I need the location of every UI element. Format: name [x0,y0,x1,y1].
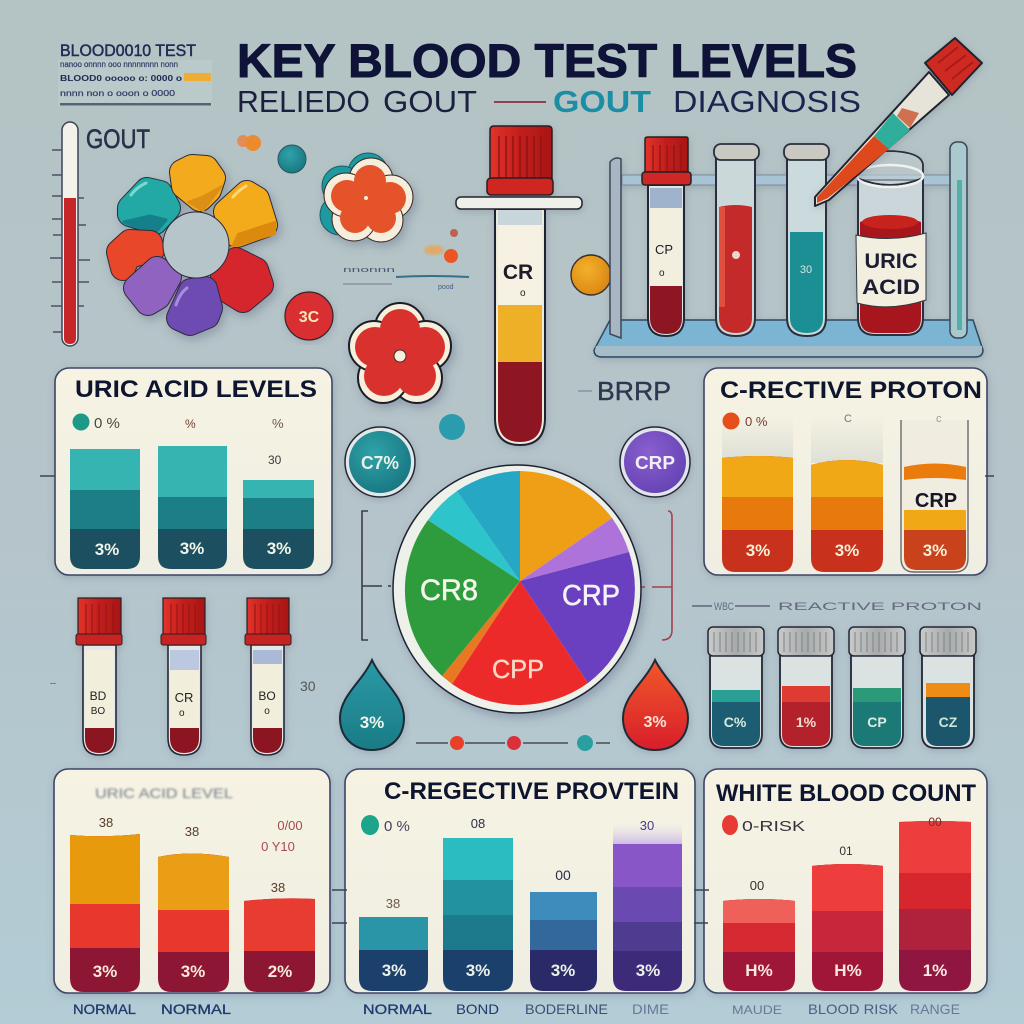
value labels: 0/00 [277,818,303,833]
legend: 0-RISK [742,818,805,835]
tube 2 [714,144,759,336]
vial 3 [849,627,905,748]
centre test tube: CRP: o [520,288,526,299]
bar chart: 1% [923,961,947,980]
label: BRRP: BRRP [597,376,671,406]
jar: uric acid: ACID [862,276,920,299]
legend: 38 [386,896,400,911]
legend [72,414,284,467]
vial 3: CP [867,714,887,730]
panel: uric acid bars bottom [54,769,330,993]
value labels: 38 [185,824,199,839]
legend: 08 [471,816,485,831]
test tube rack [594,137,983,357]
thermometer gauge [50,122,90,346]
bar chart: CRP [915,490,957,512]
legend: 0 % [745,414,768,429]
dotted connector [416,735,610,751]
badge: purple CRP [620,427,690,497]
info card: blood test: BLOOD0010 TEST [60,41,196,60]
icon: teal bead [278,145,306,173]
small chart caption [343,267,469,291]
x-axis labels: BOND [456,1001,499,1017]
legend: 00 [555,867,571,883]
small labels left of tubes: -- [50,678,56,688]
tube a: BD [90,689,107,703]
heading: URIC ACID LEVELS [75,376,317,403]
pie chart: CRP [562,580,620,612]
bar chart: H% [834,961,862,980]
legend: 00 [928,815,942,829]
vial 2: 1% [796,714,817,730]
tube 3 [784,144,829,336]
info card: blood test: nnnn non o ooon o 0000 [60,89,176,98]
orange sphere [571,255,611,295]
bar chart: 3% [466,961,490,980]
bar chart [723,821,971,991]
bar chart: 3% [746,541,770,560]
vials [708,627,976,748]
pie chart [393,465,641,713]
legend: % [185,417,196,431]
tube a: BO [91,706,105,717]
bar chart: 3% [551,961,575,980]
angled test tube [815,38,982,206]
subtitle: RELIEDO [237,84,370,119]
slice: purple [520,552,635,683]
subtitle: DIAGNOSIS [673,84,861,119]
small labels left of tubes [50,678,316,694]
title: KEY BLOOD TEST LEVELS [237,34,857,87]
info card: blood test: nanoo onnnn ooo nnnnnnnn nonn [60,60,178,69]
slice: red [452,581,588,705]
icon: pill ring [119,167,275,323]
value labels: 0 Y10 [261,839,295,854]
badge: purple CRP: CRP [635,453,675,473]
panel: c-reactive protein bottom [345,769,695,993]
x-axis labels: DIME [632,1001,669,1017]
right bracket [640,511,672,640]
bar chart: 3% [267,539,291,558]
rack base [594,320,983,357]
x-axis labels: BLOOD RISK [808,1001,899,1017]
x-axis labels: NORMAL [161,1001,231,1017]
badge: teal C7% [345,427,415,497]
x-axis labels: RANGE [910,1001,960,1017]
slice: cyan [428,491,520,581]
legend: 00 [750,878,764,893]
icon: flower two [349,303,451,403]
vial 1 [708,627,764,748]
centre test tube: CRP [456,126,582,445]
bar chart [722,415,968,572]
bar chart [70,834,315,992]
cap [487,126,553,195]
icon: red tablet [285,292,333,340]
legend [722,412,942,430]
caption: reactive protein: WBC [714,601,734,613]
bar chart [359,822,682,991]
subtitle: GOUT [383,84,477,119]
info card: blood test [58,41,212,106]
centre test tube: CRP: CR [503,261,533,284]
subtitle: GOUT [553,84,651,119]
tube c: o [264,706,270,717]
jar: uric acid [856,151,926,335]
legend [722,815,942,893]
x-axis labels [73,1001,960,1017]
rack posts [610,142,967,338]
bar chart: 3% [636,961,660,980]
vial 4: CZ [939,714,958,730]
tube c [245,598,291,755]
caption: reactive protein: REACTIVE PROTON [778,601,982,613]
bar chart: 3% [95,540,119,559]
drop: teal: 3% [360,713,384,732]
legend: % [272,416,284,431]
pie chart: CPP [492,654,544,684]
bar chart: 3% [835,541,859,560]
bar chart [70,446,314,569]
left bracket [362,511,391,640]
vial 1: C% [724,714,747,730]
vial 4 [920,627,976,748]
bar chart: 3% [93,962,117,981]
small chart caption: pood [438,284,454,291]
slice: green [405,520,520,676]
slice: orange sliver [442,581,520,684]
bar chart: 3% [382,961,406,980]
bar chart: H% [745,961,773,980]
legend: C [844,413,852,425]
tube 1 [642,137,691,336]
x-axis labels: NORMAL [363,1001,432,1017]
tube a [76,598,122,755]
x-axis labels: NORMAL [73,1001,136,1017]
panel: c-reactive protein top [704,368,987,575]
small blood tubes [76,598,291,755]
slice: yellow [520,471,612,581]
axis ticks between panels [40,476,994,923]
small chart caption: nnonnn [343,267,395,274]
legend: 0 % [94,415,120,432]
heading: C-REGECTIVE PROVTEIN [384,778,679,805]
heading: URIC ACID LEVEL [95,785,233,801]
accent splash [424,229,458,263]
legend [361,815,654,911]
tube b: CR [175,690,193,705]
slice: light purple [520,518,629,581]
jar: uric acid: URIC [864,250,918,273]
title [237,34,861,119]
subtitle [237,84,861,119]
legend: c [936,413,942,425]
value labels: 38 [99,815,113,830]
x-axis labels: MAUDE [732,1003,782,1017]
icon: orange dot [237,135,261,151]
badge: teal C7%: C7% [361,453,399,473]
small teal bead [439,414,465,440]
bar chart: 3% [923,541,947,560]
tube b [161,598,206,755]
legend: 0 % [384,818,410,835]
drop: red: 3% [643,714,667,731]
drop: teal [340,660,404,750]
bar chart: 3% [181,962,205,981]
bar chart: 2% [268,962,292,981]
pie chart: CR8 [420,574,478,607]
heading: WHITE BLOOD COUNT [716,780,976,807]
vial 2 [778,627,834,748]
value labels: 38 [271,880,285,895]
tube 1: CP [655,242,673,257]
heading: C-RECTIVE PROTON [720,377,982,404]
tube 3: 30 [800,264,812,276]
tube 1: o [659,268,665,279]
panel: uric acid levels [55,368,332,575]
panel: white blood count [704,769,987,993]
x-axis labels: BODERLINE [525,1001,608,1017]
label: gout: GOUT [86,124,150,154]
tube c: BO [258,689,276,703]
small labels left of tubes: 30 [300,678,316,694]
icon: flower one [320,153,413,242]
caption: reactive protein [692,601,982,613]
legend: 30 [640,818,654,833]
legend: 01 [839,844,853,858]
legend: 30 [268,453,282,467]
tube b: o [179,708,185,719]
icon: red tablet: 3C [299,309,320,326]
info card: blood test: BLOOD0 ooooo o: 0000 o [60,73,182,83]
bar chart: 3% [180,539,204,558]
slice: blue [457,471,520,581]
value labels [99,815,303,895]
drop: red [623,660,688,750]
